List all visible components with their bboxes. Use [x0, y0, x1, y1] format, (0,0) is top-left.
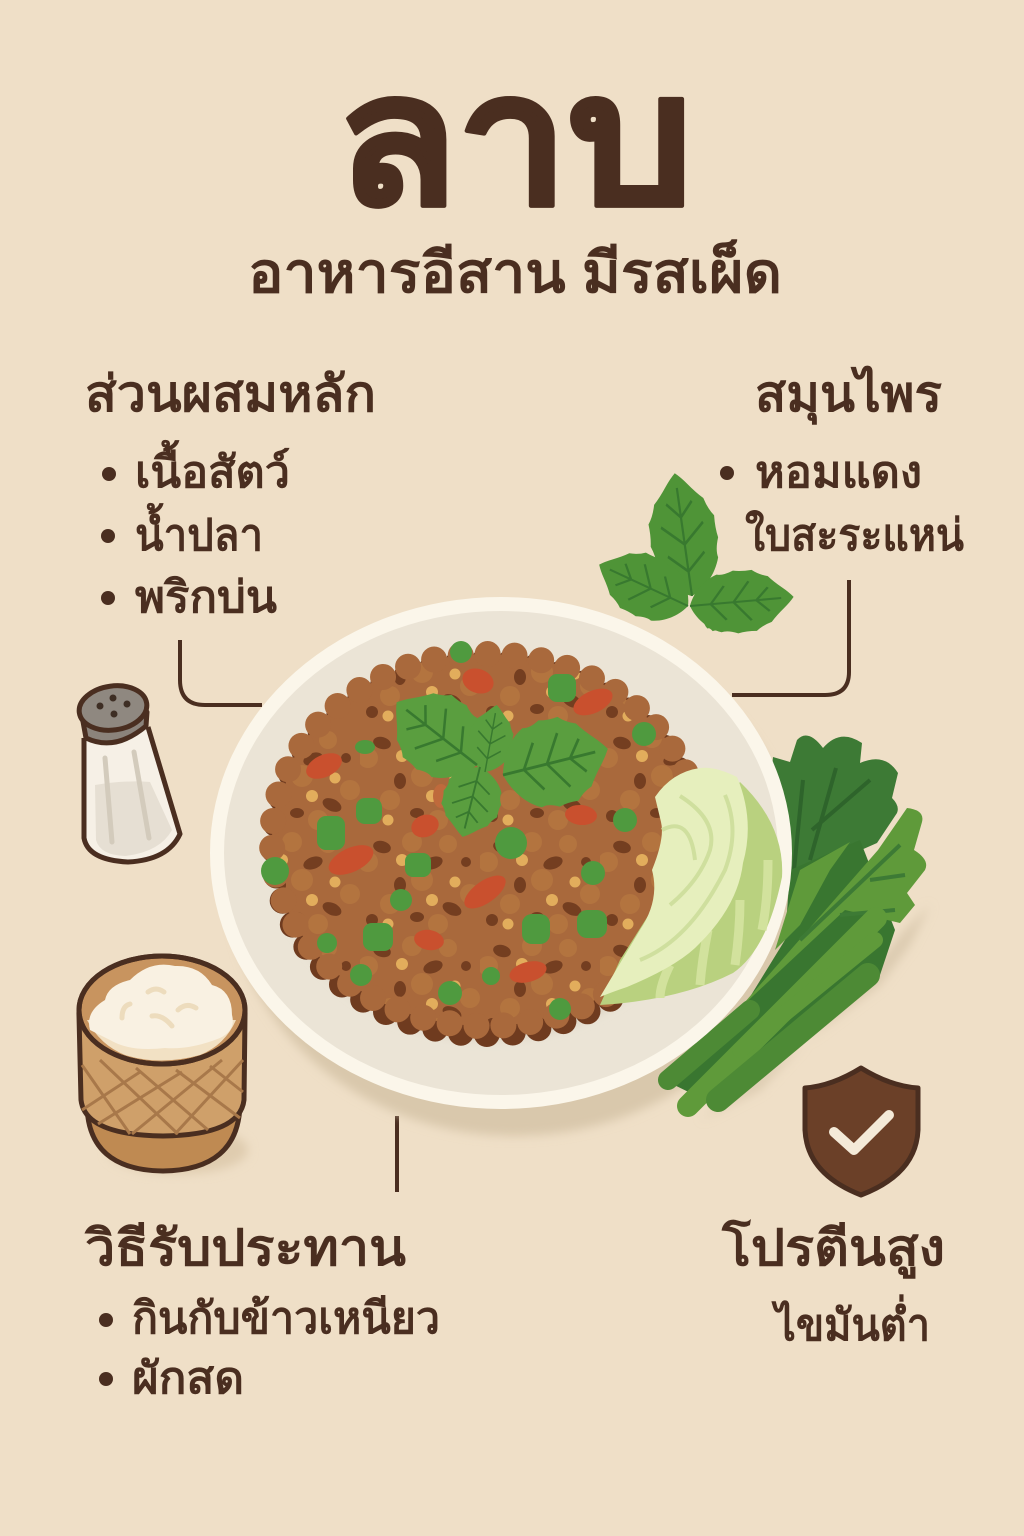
icon: mint leaves	[586, 468, 796, 637]
bullet: fish sauce: น้ำปลา	[135, 502, 263, 560]
plate	[210, 597, 792, 1109]
title: ลาบ	[337, 38, 693, 242]
meat mound	[272, 654, 702, 1039]
text: mint: ใบสะระแหน่	[745, 509, 964, 560]
connector: serving to plate	[395, 1116, 399, 1192]
bullet: meat: เนื้อสัตว์	[135, 439, 290, 497]
bullet: fish sauce	[101, 502, 263, 560]
bullet: with sticky rice: กินกับข้าวเหนียว	[132, 1294, 440, 1343]
chili slices	[302, 664, 617, 987]
basil garnish	[372, 670, 619, 844]
panel: herbs	[720, 365, 964, 560]
icon: shield check	[805, 1068, 918, 1195]
cabbage	[600, 768, 782, 1005]
heading: herbs: สมุนไพร	[755, 365, 942, 425]
subtitle: อาหารอีสาน มีรสเผ็ด	[248, 238, 782, 304]
illustration: plate of larb	[210, 597, 792, 1109]
panel: nutrition	[721, 1218, 945, 1350]
heading: main ingredients: ส่วนผสมหลัก	[85, 366, 376, 422]
connector: herbs to plate	[732, 580, 849, 695]
connector: ingredients to plate	[180, 640, 262, 705]
bullet: ground chili: พริกบ่น	[135, 573, 277, 622]
icon: salt shaker	[76, 681, 180, 862]
illustration: plate shadow	[229, 624, 801, 1136]
heading: how to eat: วิธีรับประทาน	[84, 1220, 406, 1276]
panel: how to eat	[84, 1220, 440, 1403]
heading: high protein: โปรตีนสูง	[721, 1218, 945, 1279]
text: low fat: ไขมันต่ำ	[771, 1294, 930, 1350]
panel: main ingredients	[85, 366, 376, 622]
green bits	[261, 641, 656, 1020]
icon: side greens	[660, 736, 930, 1120]
bullet: meat	[102, 439, 290, 497]
bullet: shallot: หอมแดง	[755, 448, 922, 497]
icon: sticky rice basket	[79, 956, 248, 1174]
bullet: fresh vegetables: ผักสด	[132, 1354, 244, 1403]
